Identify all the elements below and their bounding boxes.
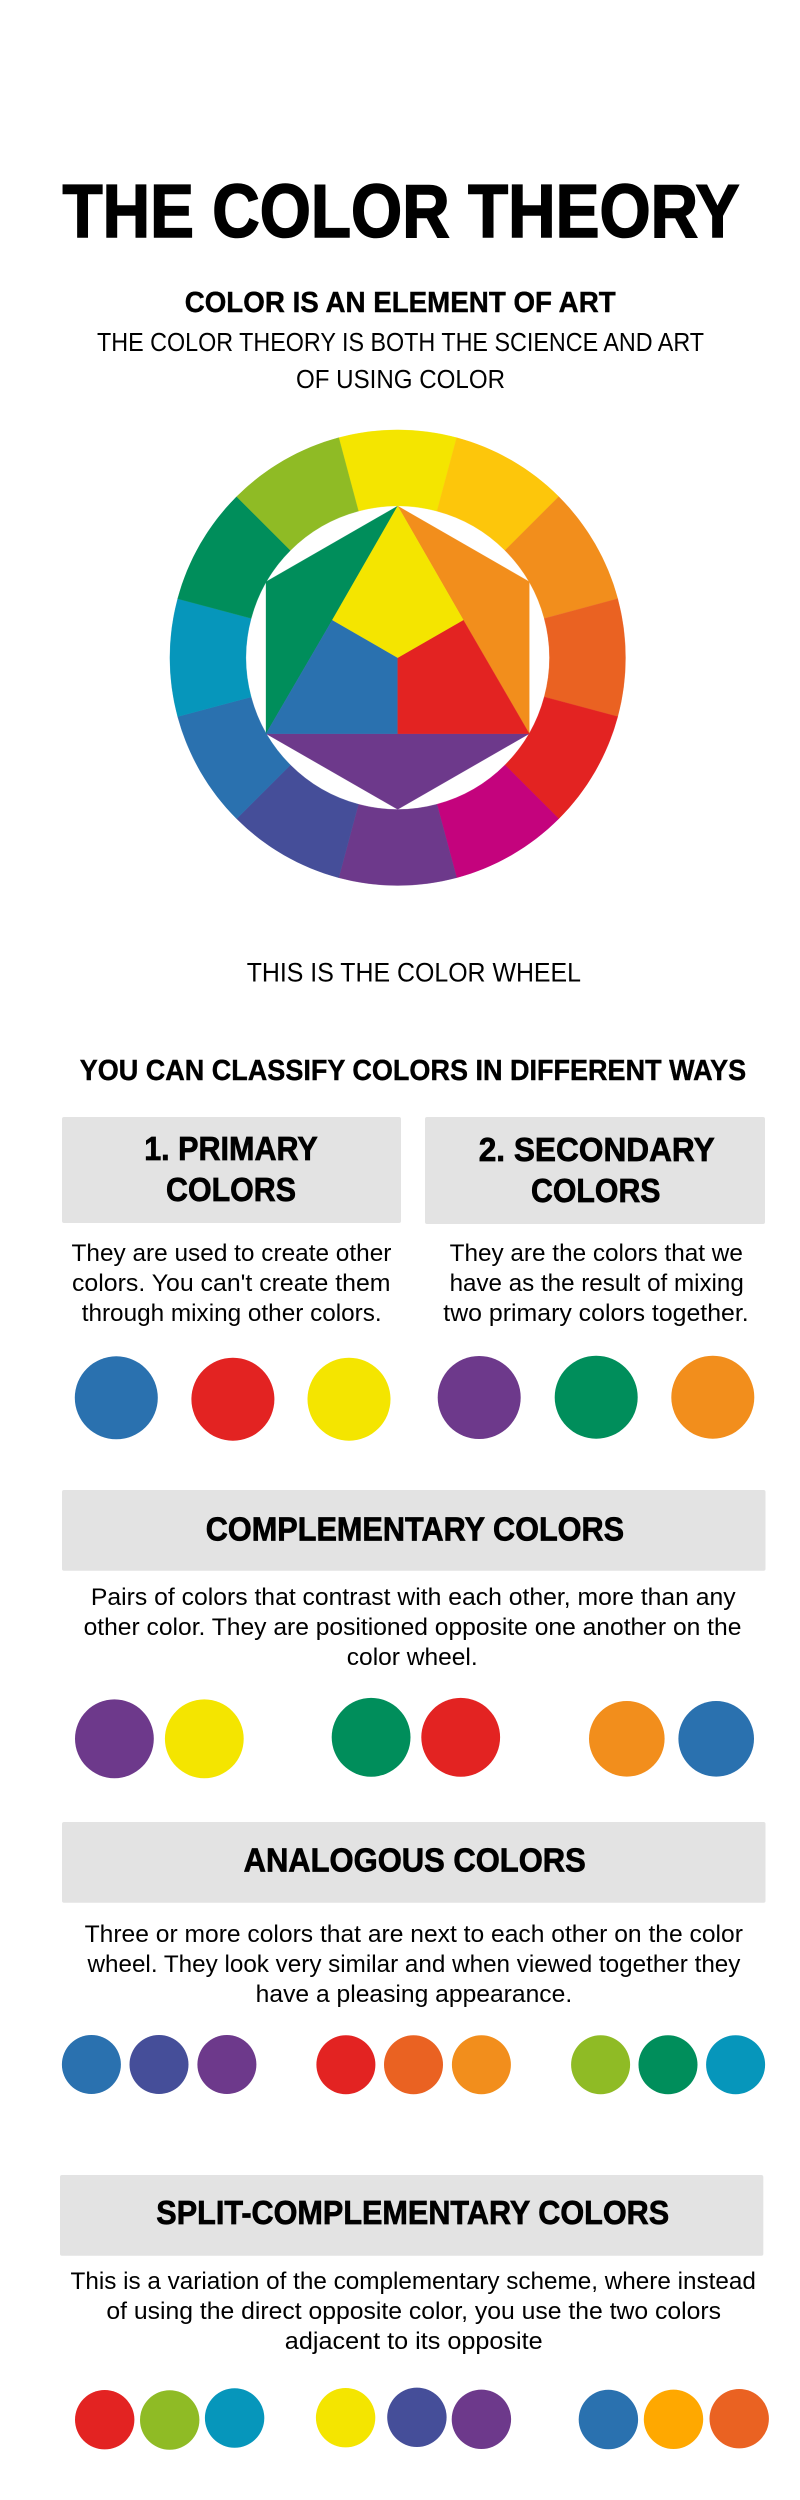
subtitle block bbox=[97, 287, 704, 394]
primary description bbox=[72, 1240, 391, 1327]
panel: split-complementary colors bbox=[60, 2175, 769, 2450]
color wheel bbox=[170, 430, 626, 886]
primary heading: 1. PRIMARY bbox=[144, 1130, 318, 1167]
primary description: colors. You can't create them bbox=[72, 1270, 390, 1297]
complementary description: Pairs of colors that contrast with each other, more than any bbox=[91, 1584, 736, 1611]
split-complementary header box bbox=[60, 2175, 763, 2256]
analogous swatch trios bbox=[62, 2035, 765, 2094]
secondary description: have as the result of mixing bbox=[450, 1270, 744, 1297]
split-complementary description bbox=[70, 2268, 756, 2355]
split-complementary description: of using the direct opposite color, you use the two colors bbox=[106, 2298, 721, 2325]
panel: primary colors bbox=[62, 1117, 401, 1441]
primary swatches bbox=[75, 1356, 391, 1441]
primary header box bbox=[62, 1117, 401, 1223]
secondary heading: 2. SECONDARY bbox=[479, 1131, 715, 1168]
primary description: through mixing other colors. bbox=[82, 1300, 382, 1327]
analogous heading: ANALOGOUS COLORS bbox=[244, 1842, 586, 1879]
secondary description: two primary colors together. bbox=[443, 1300, 749, 1327]
analogous header box bbox=[62, 1822, 766, 1903]
complementary description: color wheel. bbox=[347, 1644, 478, 1671]
primary heading bbox=[144, 1130, 318, 1208]
analogous description: Three or more colors that are next to each other on the color bbox=[85, 1921, 743, 1948]
subtitle block: OF USING COLOR bbox=[296, 364, 505, 394]
complementary header box bbox=[62, 1490, 766, 1571]
classification heading: YOU CAN CLASSIFY COLORS IN DIFFERENT WAYS bbox=[80, 1055, 746, 1087]
subtitle block: THE COLOR THEORY IS BOTH THE SCIENCE AND ART bbox=[97, 327, 704, 357]
panel: secondary colors bbox=[425, 1117, 765, 1439]
complementary heading: COMPLEMENTARY COLORS bbox=[206, 1511, 624, 1548]
secondary description: They are the colors that we bbox=[450, 1240, 743, 1267]
outer ring of twelve hues bbox=[170, 430, 626, 886]
panel: complementary colors bbox=[62, 1490, 766, 1778]
inner hexagon of primary and secondary colors bbox=[266, 506, 529, 809]
analogous description bbox=[85, 1921, 743, 2008]
secondary description bbox=[443, 1240, 749, 1327]
analogous description: have a pleasing appearance. bbox=[256, 1981, 572, 2008]
split-complementary description: This is a variation of the complementary scheme, where instead bbox=[70, 2268, 756, 2295]
secondary heading: COLORS bbox=[531, 1172, 660, 1209]
primary heading: COLORS bbox=[166, 1171, 296, 1208]
split-complementary swatch trios bbox=[75, 2388, 769, 2450]
subtitle block: COLOR IS AN ELEMENT OF ART bbox=[185, 287, 616, 319]
complementary description: other color. They are positioned opposite one another on the bbox=[84, 1614, 741, 1641]
wheel caption: THIS IS THE COLOR WHEEL bbox=[247, 957, 581, 987]
primary description: They are used to create other bbox=[72, 1240, 391, 1267]
secondary header box bbox=[425, 1117, 765, 1224]
split-complementary heading: SPLIT-COMPLEMENTARY COLORS bbox=[156, 2194, 669, 2231]
secondary swatches bbox=[438, 1356, 754, 1439]
complementary swatch pairs bbox=[75, 1698, 754, 1778]
split-complementary description: adjacent to its opposite bbox=[285, 2328, 543, 2355]
panel: analogous colors bbox=[62, 1822, 765, 2094]
analogous description: wheel. They look very similar and when viewed together they bbox=[87, 1951, 741, 1978]
secondary heading bbox=[479, 1131, 715, 1209]
complementary description bbox=[84, 1584, 741, 1671]
